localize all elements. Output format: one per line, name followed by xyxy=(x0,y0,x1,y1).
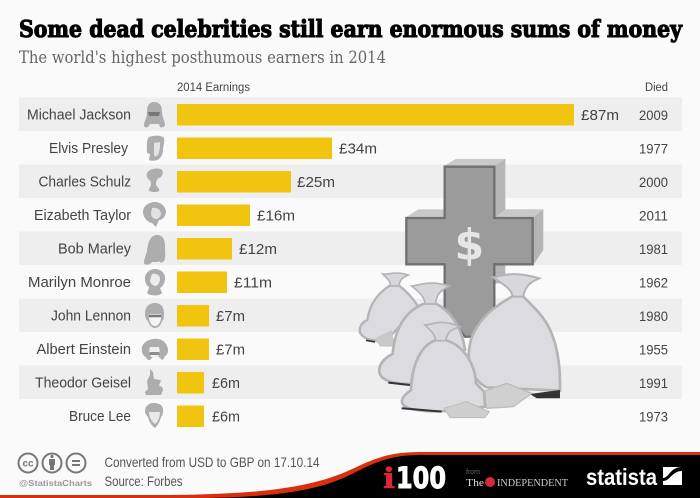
row: Elvis Presley: 1977 xyxy=(639,142,668,156)
row: Elizabeth Taylor: Eizabeth Taylor xyxy=(34,208,131,224)
row: Charles Schulz: Charles Schulz xyxy=(38,174,131,190)
logo: i100 xyxy=(383,461,446,495)
row: Theodor Geisel: £6m xyxy=(212,375,240,392)
logo: The Independent xyxy=(466,469,569,489)
icon: dollar sign: $ xyxy=(454,220,484,270)
row: Elvis Presley: £34m xyxy=(339,140,377,158)
footer band xyxy=(0,452,700,498)
row: John Lennon: 1980 xyxy=(639,309,668,324)
row: Bob Marley: Bob Marley xyxy=(58,242,132,258)
row: Charles Schulz xyxy=(38,168,668,192)
logo: The Independent: from xyxy=(466,469,480,476)
row: Theodor Geisel xyxy=(35,369,668,395)
row: Michael Jackson xyxy=(27,102,668,127)
row: Elizabeth Taylor: 2011 xyxy=(639,208,668,224)
logo: statista: statista xyxy=(586,464,657,490)
row: Bob Marley: 1981 xyxy=(639,242,668,257)
row: Marilyn Monroe: 1962 xyxy=(639,276,668,290)
note and source xyxy=(104,454,320,489)
row: Michael Jackson: £87m xyxy=(581,107,619,124)
row: John Lennon: John Lennon xyxy=(51,308,131,324)
row: John Lennon: £7m xyxy=(216,308,245,325)
row: Bruce Lee: £6m xyxy=(212,408,240,426)
note and source: Source: Forbes xyxy=(104,473,182,489)
row: Albert Einstein: £7m xyxy=(216,342,245,358)
icon: front money bag xyxy=(402,322,489,418)
row: Marilyn Monroe: £11m xyxy=(234,274,272,292)
row: Albert Einstein: 1955 xyxy=(639,342,668,358)
row: Elizabeth Taylor xyxy=(34,202,668,227)
column heading: earnings: 2014 Earnings xyxy=(177,82,250,94)
icon: back left money bag xyxy=(360,273,418,347)
illustration: gravestone cross with money bags xyxy=(360,159,560,418)
row: Charles Schulz: £25m xyxy=(297,174,335,191)
row: Bruce Lee xyxy=(69,403,668,428)
subtitle: The world's highest posthumous earners in 2014 xyxy=(19,48,386,68)
icon: creative commons badges xyxy=(18,454,86,472)
row: Elizabeth Taylor: £16m xyxy=(257,208,295,224)
row: Charles Schulz: 2000 xyxy=(639,175,668,190)
row: Bob Marley xyxy=(58,235,668,265)
logo: The Independent: The xyxy=(466,477,484,489)
row: Bob Marley: £12m xyxy=(239,241,277,258)
row bands xyxy=(19,98,682,399)
row: Bruce Lee: 1973 xyxy=(639,410,668,424)
row: Elvis Presley: Elvis Presley xyxy=(49,141,129,157)
row: Michael Jackson: 2009 xyxy=(639,108,668,123)
row: Albert Einstein xyxy=(36,338,668,360)
row: Michael Jackson: Michael Jackson xyxy=(27,108,131,124)
logo: i100: 100 xyxy=(396,461,446,495)
icon: creative commons badges: cc xyxy=(22,458,34,470)
column heading: died: Died xyxy=(645,82,668,94)
row: John Lennon xyxy=(51,303,668,328)
icon: middle money bag xyxy=(379,283,465,385)
row: Albert Einstein: Albert Einstein xyxy=(36,342,131,358)
logo: The Independent: INDEPENDENT xyxy=(497,478,569,489)
icon: large right money bag xyxy=(469,274,560,408)
row: Marilyn Monroe: Marilyn Monroe xyxy=(28,275,131,291)
icon: cross xyxy=(406,159,543,337)
row: Elvis Presley xyxy=(49,136,668,161)
row: Theodor Geisel: 1991 xyxy=(639,376,668,391)
row: Bruce Lee: Bruce Lee xyxy=(69,409,131,425)
logo: i100: i xyxy=(383,462,395,495)
row: Marilyn Monroe xyxy=(28,269,668,295)
handle: @StatistaCharts xyxy=(19,478,92,488)
note and source: Converted from USD to GBP on 17.10.14 xyxy=(104,454,320,470)
row: Theodor Geisel: Theodor Geisel xyxy=(35,376,131,392)
